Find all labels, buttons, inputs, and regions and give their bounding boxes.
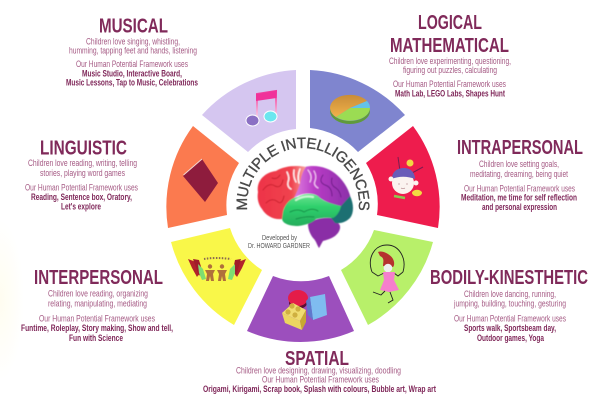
segment: intrapersonal (crimson) <box>366 126 440 228</box>
segment: spatial (purple) <box>247 276 354 342</box>
text block: spatial: SPATIAL <box>285 348 349 370</box>
text block: interpersonal: INTERPERSONAL <box>34 267 163 289</box>
text block: logical mathematical: LOGICAL <box>418 12 482 34</box>
segment: linguistic (orange) <box>166 126 239 228</box>
text block: bodily-kinesthetic: Children love dancing, running, <box>464 289 556 299</box>
text block: musical: Music Lessons, Tap to Music, Celebrations <box>66 78 198 88</box>
text block: musical: humming, tapping feet and hands, listening <box>69 46 197 56</box>
text block: intrapersonal: and personal expression <box>482 202 557 212</box>
icon: child with thinking cap <box>388 157 423 198</box>
brain: temporal lobe <box>282 194 341 226</box>
brain: gyri folds <box>263 169 341 219</box>
brain: parietal lobe <box>294 166 351 207</box>
text block: bodily-kinesthetic: Outdoor games, Yoga <box>477 333 545 343</box>
text block: logical mathematical: Our Human Potential Framework uses <box>393 79 506 89</box>
text block: bodily-kinesthetic: Sports walk, Sportsbeam day, <box>464 323 556 333</box>
segment: bodily-kinesthetic (lime) <box>341 230 433 325</box>
text block: logical mathematical: MATHEMATICAL <box>390 35 509 57</box>
brain: occipital lobe <box>331 196 353 223</box>
icon: toy blocks <box>282 290 327 330</box>
brain: cerebellum and stem <box>308 218 340 248</box>
text block: bodily-kinesthetic <box>430 267 588 343</box>
text block: musical: MUSICAL <box>99 16 168 38</box>
text block: logical mathematical: figuring out puzzles, calculating <box>403 65 497 75</box>
text block: interpersonal: relating, manipulating, mediating <box>48 298 147 308</box>
text block: spatial: Children love designing, drawing, visualizing, doodling <box>236 366 401 376</box>
text block: spatial: Origami, Kirigami, Scrap book, Splash with colours, Bubble art, Wrap art <box>203 384 436 394</box>
icon: circle of people <box>188 258 246 281</box>
credit: developed by: Dr. HOWARD GARDNER <box>248 243 310 250</box>
icon: book <box>183 159 218 202</box>
text block: musical <box>66 16 198 88</box>
panel: seven-segment wheel <box>166 70 440 342</box>
segment: musical (lilac) <box>202 70 296 152</box>
text block: musical: Music Studio, Interactive Board, <box>82 68 182 78</box>
icon: girl with jump rope <box>370 245 404 303</box>
brain: frontal lobe <box>258 166 306 219</box>
text block: interpersonal: Fun with Science <box>69 333 123 343</box>
text block: linguistic: stories, playing word games <box>40 168 125 178</box>
text block: linguistic: LINGUISTIC <box>40 138 127 160</box>
text block: interpersonal: Children love reading, organizing <box>48 288 148 298</box>
icon: music note <box>246 91 277 126</box>
text block: logical mathematical: Math Lab, LEGO Labs, Shapes Hunt <box>395 88 505 98</box>
text block: spatial <box>203 348 436 394</box>
text block: linguistic: Let's explore <box>61 202 101 212</box>
text block: interpersonal <box>21 267 173 343</box>
text block: linguistic: Our Human Potential Framework uses <box>25 182 138 192</box>
text block: interpersonal: Funtime, Roleplay, Story making, Show and tell, <box>21 323 173 333</box>
text block: linguistic: Children love reading, writing, telling <box>28 158 137 168</box>
segment: logical mathematical (blue) <box>310 70 405 152</box>
credit: developed by: Developed by <box>262 235 297 242</box>
illustration: coloured brain <box>258 166 353 248</box>
text block: musical: Children love singing, whistling, <box>86 36 180 46</box>
text block: spatial: Our Human Potential Framework uses <box>262 374 379 384</box>
text block: logical mathematical: Children love experimenting, questioning, <box>389 56 511 66</box>
text block: intrapersonal <box>457 137 583 212</box>
segment: interpersonal (yellow) <box>171 228 262 325</box>
icon: pie chart <box>330 95 370 124</box>
label: wheel title: MULTIPLE INTELLIGENCES <box>236 137 370 210</box>
credit: developed by <box>248 235 310 250</box>
text block: musical: Our Human Potential Framework uses <box>76 59 188 69</box>
text block: intrapersonal: Children love setting goals, <box>479 159 559 169</box>
text block: linguistic <box>25 138 138 212</box>
text block: linguistic: Reading, Sentence box, Oratory, <box>31 192 132 202</box>
text block: logical mathematical <box>389 12 511 98</box>
text block: interpersonal: Our Human Potential Framework uses <box>39 314 155 324</box>
